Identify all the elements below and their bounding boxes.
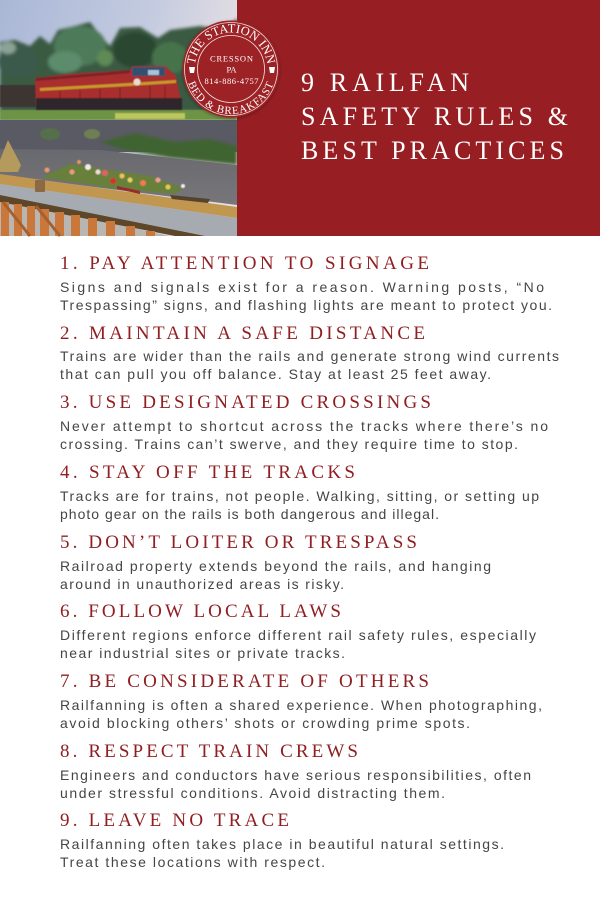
deck railing — [0, 174, 237, 218]
mug — [35, 180, 45, 192]
photo: train passing the inn deck — [0, 0, 237, 236]
rule 8: 8. RESPECT TRAIN CREWS — [60, 741, 358, 762]
fence posts — [1, 202, 155, 236]
rail cars — [0, 85, 36, 107]
rule 4: Tracks are for trains, not people. Walking, sitting, or setting up — [60, 488, 539, 504]
rule 5: around in unauthorized areas is risky. — [60, 576, 344, 592]
rule 1: Signs and signals exist for a reason. Warning posts, “No — [60, 279, 544, 295]
gravel bank — [0, 120, 237, 152]
logo badge: The Station Inn: CRESSON — [210, 54, 253, 64]
rule 4: 4. STAY OFF THE TRACKS — [60, 462, 355, 483]
rule 7: 7. BE CONSIDERATE OF OTHERS — [60, 671, 429, 692]
title — [301, 68, 568, 165]
rule 2: 2. MAINTAIN A SAFE DISTANCE — [60, 323, 425, 344]
logo badge: The Station Inn: BED & BREAKFAST — [188, 80, 273, 114]
rule 7: avoid blocking others’ shots or crowding prime spots. — [60, 715, 470, 731]
rule 5 — [60, 532, 491, 592]
rule 2 — [60, 323, 559, 382]
logo badge: The Station Inn: 814-886-4757 — [204, 76, 258, 86]
locomotive — [35, 66, 182, 111]
parking lot — [0, 149, 237, 205]
rule 2: that can pull you off balance. Stay at least 25 feet away. — [60, 366, 491, 382]
rule 6: near industrial sites or private tracks. — [60, 645, 345, 661]
rule 4: photo gear on the rails is both dangerous and illegal. — [60, 506, 439, 522]
rule 6: 6. FOLLOW LOCAL LAWS — [60, 601, 341, 622]
rule 6: Different regions enforce different rail safety rules, especially — [60, 627, 536, 643]
grass strip — [0, 110, 237, 120]
fence backdrop — [0, 200, 170, 236]
rule 7: Railfanning is often a shared experience. When photographing, — [60, 697, 542, 713]
rule 3: Never attempt to shortcut across the tracks where there’s no — [60, 418, 548, 434]
title: BEST PRACTICES — [301, 136, 564, 165]
rule 6 — [60, 601, 536, 661]
rule 1: 1. PAY ATTENTION TO SIGNAGE — [60, 253, 429, 274]
rule 8: Engineers and conductors have serious responsibilities, often — [60, 767, 531, 783]
flower box — [42, 160, 185, 194]
rule 7 — [60, 671, 542, 731]
rule 9 — [60, 810, 504, 870]
rule 5: Railroad property extends beyond the rails, and hanging — [60, 558, 491, 574]
logo badge: The Station Inn: PA — [226, 64, 237, 74]
title: SAFETY RULES & — [301, 102, 568, 131]
rule 1: Trespassing” signs, and flashing lights are meant to protect you. — [60, 297, 552, 313]
umbrella corner — [0, 140, 21, 172]
rule 8: under stressful conditions. Avoid distracting them. — [60, 785, 445, 801]
rule 9: 9. LEAVE NO TRACE — [60, 810, 289, 831]
rule 9: Treat these locations with respect. — [60, 854, 325, 870]
rule 2: Trains are wider than the rails and generate strong wind currents — [60, 348, 559, 364]
rule 4 — [60, 462, 539, 522]
logo badge: The Station Inn — [182, 20, 281, 120]
rule 9: Railfanning often takes place in beautiful natural settings. — [60, 836, 504, 852]
title: 9 RAILFAN — [301, 68, 469, 97]
rule 3: crossing. Trains can’t swerve, and they require time to stop. — [60, 436, 518, 452]
panel: red title background — [237, 0, 600, 236]
logo badge: The Station Inn: THE STATION INN — [186, 24, 276, 64]
rule 3 — [60, 392, 548, 452]
rule 1 — [60, 253, 552, 313]
rule 5: 5. DON’T LOITER OR TRESPASS — [60, 532, 417, 553]
rule 3: 3. USE DESIGNATED CROSSINGS — [60, 392, 431, 413]
trees — [0, 18, 237, 112]
rule 8 — [60, 741, 531, 801]
